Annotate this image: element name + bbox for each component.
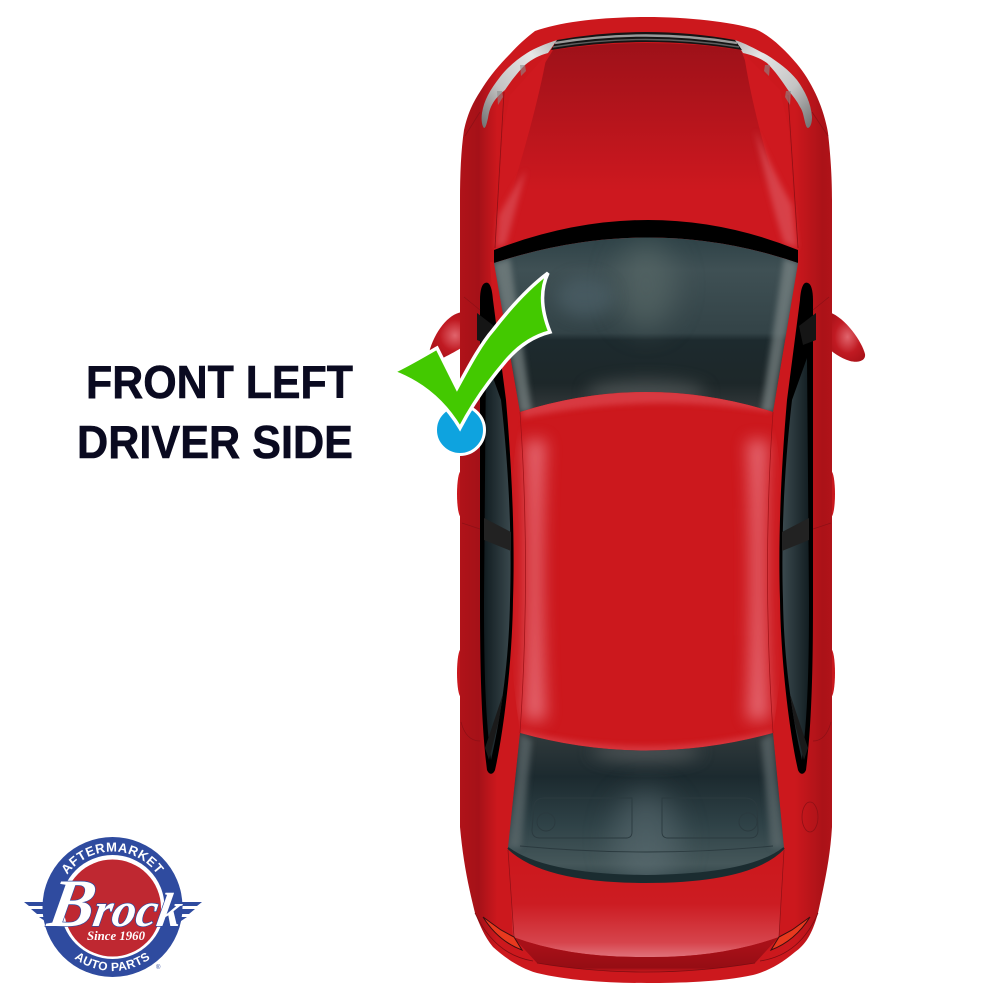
- logo script wordmark: Brock: [42, 865, 190, 941]
- left door handles: [457, 471, 465, 697]
- rear window: [508, 733, 784, 890]
- right tail light: [771, 917, 810, 950]
- logo outer ring: [42, 837, 182, 977]
- trunk lid: [508, 850, 784, 957]
- right side mirror: [826, 312, 865, 362]
- heading: front left driver side: DRIVER SIDE: [77, 416, 353, 468]
- right door handles: [827, 471, 835, 697]
- windshield frame: [494, 220, 798, 263]
- bumper line: [475, 913, 818, 972]
- hood side panels: [495, 54, 797, 248]
- logo wings: [24, 902, 202, 921]
- hood: [494, 43, 798, 250]
- logo ring text top: AFTERMARKET: [62, 842, 164, 874]
- roof: [508, 388, 785, 755]
- logo ring text bottom: AUTO PARTS: [74, 953, 150, 972]
- windshield: [494, 238, 798, 412]
- marker: blue dot: [436, 406, 484, 454]
- logo since 1960: Since 1960: [87, 929, 146, 943]
- left tail light: [483, 917, 522, 950]
- hood seam lines: [465, 92, 828, 248]
- right headlight: [735, 40, 812, 128]
- left headlight: [482, 40, 557, 128]
- front grille: [551, 32, 742, 50]
- icon: green check mark: [393, 273, 550, 428]
- car body: [460, 17, 832, 983]
- logo red centre: [64, 860, 161, 956]
- left side window: [477, 283, 514, 774]
- left roof pillar: [490, 262, 520, 775]
- red car, top view: [430, 17, 865, 983]
- trunk seams: [508, 850, 784, 937]
- logo: Brock Aftermarket Auto Parts: [24, 837, 202, 977]
- fuel cap: [802, 802, 818, 832]
- left side mirror: [430, 312, 476, 359]
- logo registered mark: ®: [156, 964, 161, 971]
- heading: front left driver side: [77, 356, 353, 468]
- heading: front left driver side: FRONT LEFT: [86, 356, 353, 408]
- right side window: [779, 283, 816, 774]
- rear bumper: [513, 937, 779, 972]
- door seam lines: [461, 297, 831, 741]
